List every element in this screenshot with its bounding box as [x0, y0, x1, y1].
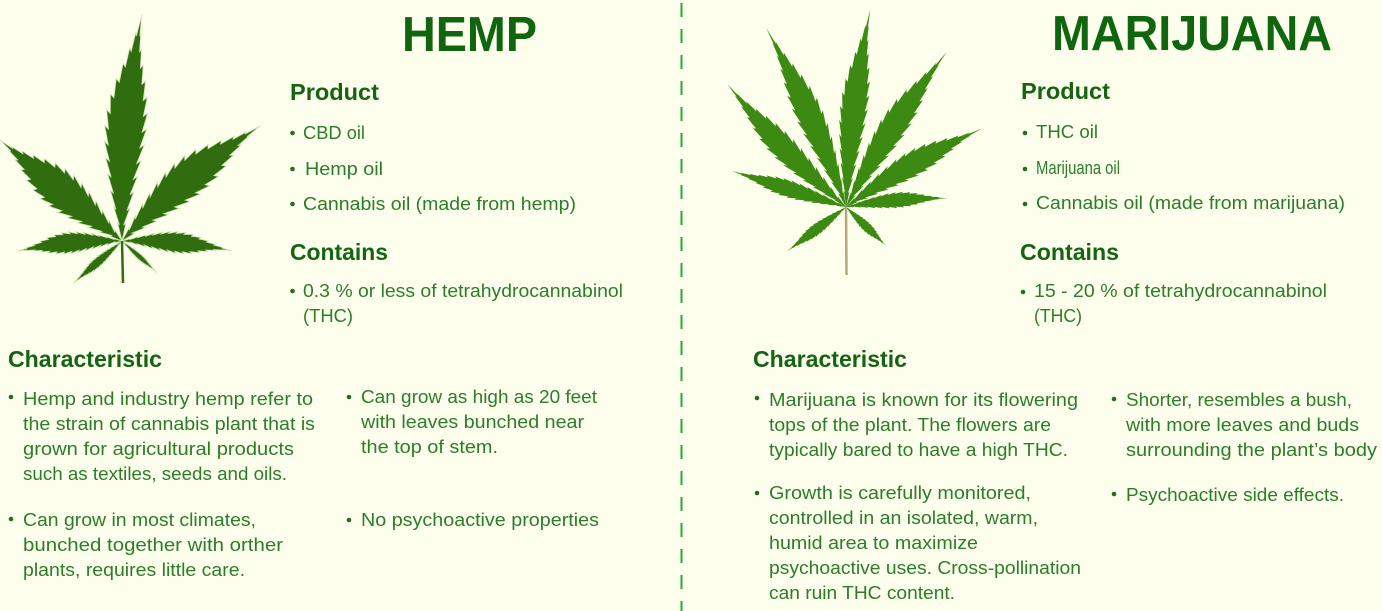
marijuana product section: Cannabis oil (made from marijuana)	[1036, 192, 1345, 213]
hemp contains section: (THC)	[303, 305, 353, 326]
marijuana characteristic section: psychoactive uses. Cross-pollination	[769, 557, 1081, 578]
icon: marijuana leaf	[715, 7, 987, 275]
marijuana characteristic section: humid area to maximize	[769, 532, 978, 553]
hemp characteristic section: the top of stem.	[361, 436, 498, 457]
marijuana product section: Marijuana oil	[1036, 157, 1120, 178]
marijuana characteristic section: can ruin THC content.	[769, 582, 955, 603]
hemp characteristic section: grown for agricultural products	[23, 438, 294, 459]
marijuana characteristic section: Psychoactive side effects.	[1126, 484, 1344, 505]
hemp product section	[290, 79, 576, 214]
hemp product section: Cannabis oil (made from hemp)	[303, 193, 576, 214]
marijuana characteristic section: typically bared to have a high THC.	[769, 439, 1068, 460]
marijuana characteristic section: controlled in an isolated, warm,	[769, 507, 1038, 528]
hemp characteristic section	[8, 346, 599, 580]
hemp characteristic section: the strain of cannabis plant that is	[23, 413, 315, 434]
hemp characteristic section: bunched together with orther	[23, 534, 283, 555]
marijuana characteristic section: with more leaves and buds	[1125, 414, 1359, 435]
marijuana characteristic section: Growth is carefully monitored,	[769, 482, 1031, 503]
marijuana characteristic section	[753, 346, 1378, 603]
hemp characteristic section: No psychoactive properties	[361, 509, 599, 530]
marijuana characteristic section: Marijuana is known for its flowering	[769, 389, 1078, 410]
title: HEMP: HEMP	[402, 8, 537, 62]
marijuana characteristic section: surrounding the plant’s body	[1126, 439, 1378, 460]
hemp characteristic section: Can grow as high as 20 feet	[361, 386, 597, 407]
title: MARIJUANA: MARIJUANA	[1052, 7, 1332, 61]
icon: hemp leaf	[0, 12, 269, 287]
hemp product section: Product	[290, 79, 379, 105]
centre dashed divider	[680, 3, 682, 611]
marijuana contains section	[1020, 239, 1327, 326]
hemp characteristic section: such as textiles, seeds and oils.	[23, 463, 287, 484]
marijuana contains section: Contains	[1020, 239, 1119, 265]
hemp product section: CBD oil	[303, 122, 365, 143]
marijuana characteristic section: tops of the plant. The flowers are	[769, 414, 1051, 435]
marijuana contains section: (THC)	[1034, 305, 1082, 326]
hemp product section: Hemp oil	[305, 158, 383, 179]
hemp characteristic section: Can grow in most climates,	[23, 509, 256, 530]
hemp contains section: 0.3 % or less of tetrahydrocannabinol	[303, 280, 623, 301]
hemp contains section: Contains	[290, 239, 388, 265]
marijuana characteristic section: Shorter, resembles a bush,	[1126, 389, 1352, 410]
hemp contains section	[290, 239, 623, 326]
marijuana product section: THC oil	[1036, 121, 1098, 142]
marijuana characteristic section: Characteristic	[753, 346, 907, 372]
hemp characteristic section: with leaves bunched near	[360, 411, 584, 432]
hemp characteristic section: Hemp and industry hemp refer to	[23, 388, 313, 409]
marijuana product section	[1021, 78, 1345, 213]
marijuana product section: Product	[1021, 78, 1110, 104]
hemp characteristic section: Characteristic	[8, 346, 162, 372]
hemp characteristic section: plants, requires little care.	[23, 559, 245, 580]
marijuana contains section: 15 - 20 % of tetrahydrocannabinol	[1034, 280, 1327, 301]
